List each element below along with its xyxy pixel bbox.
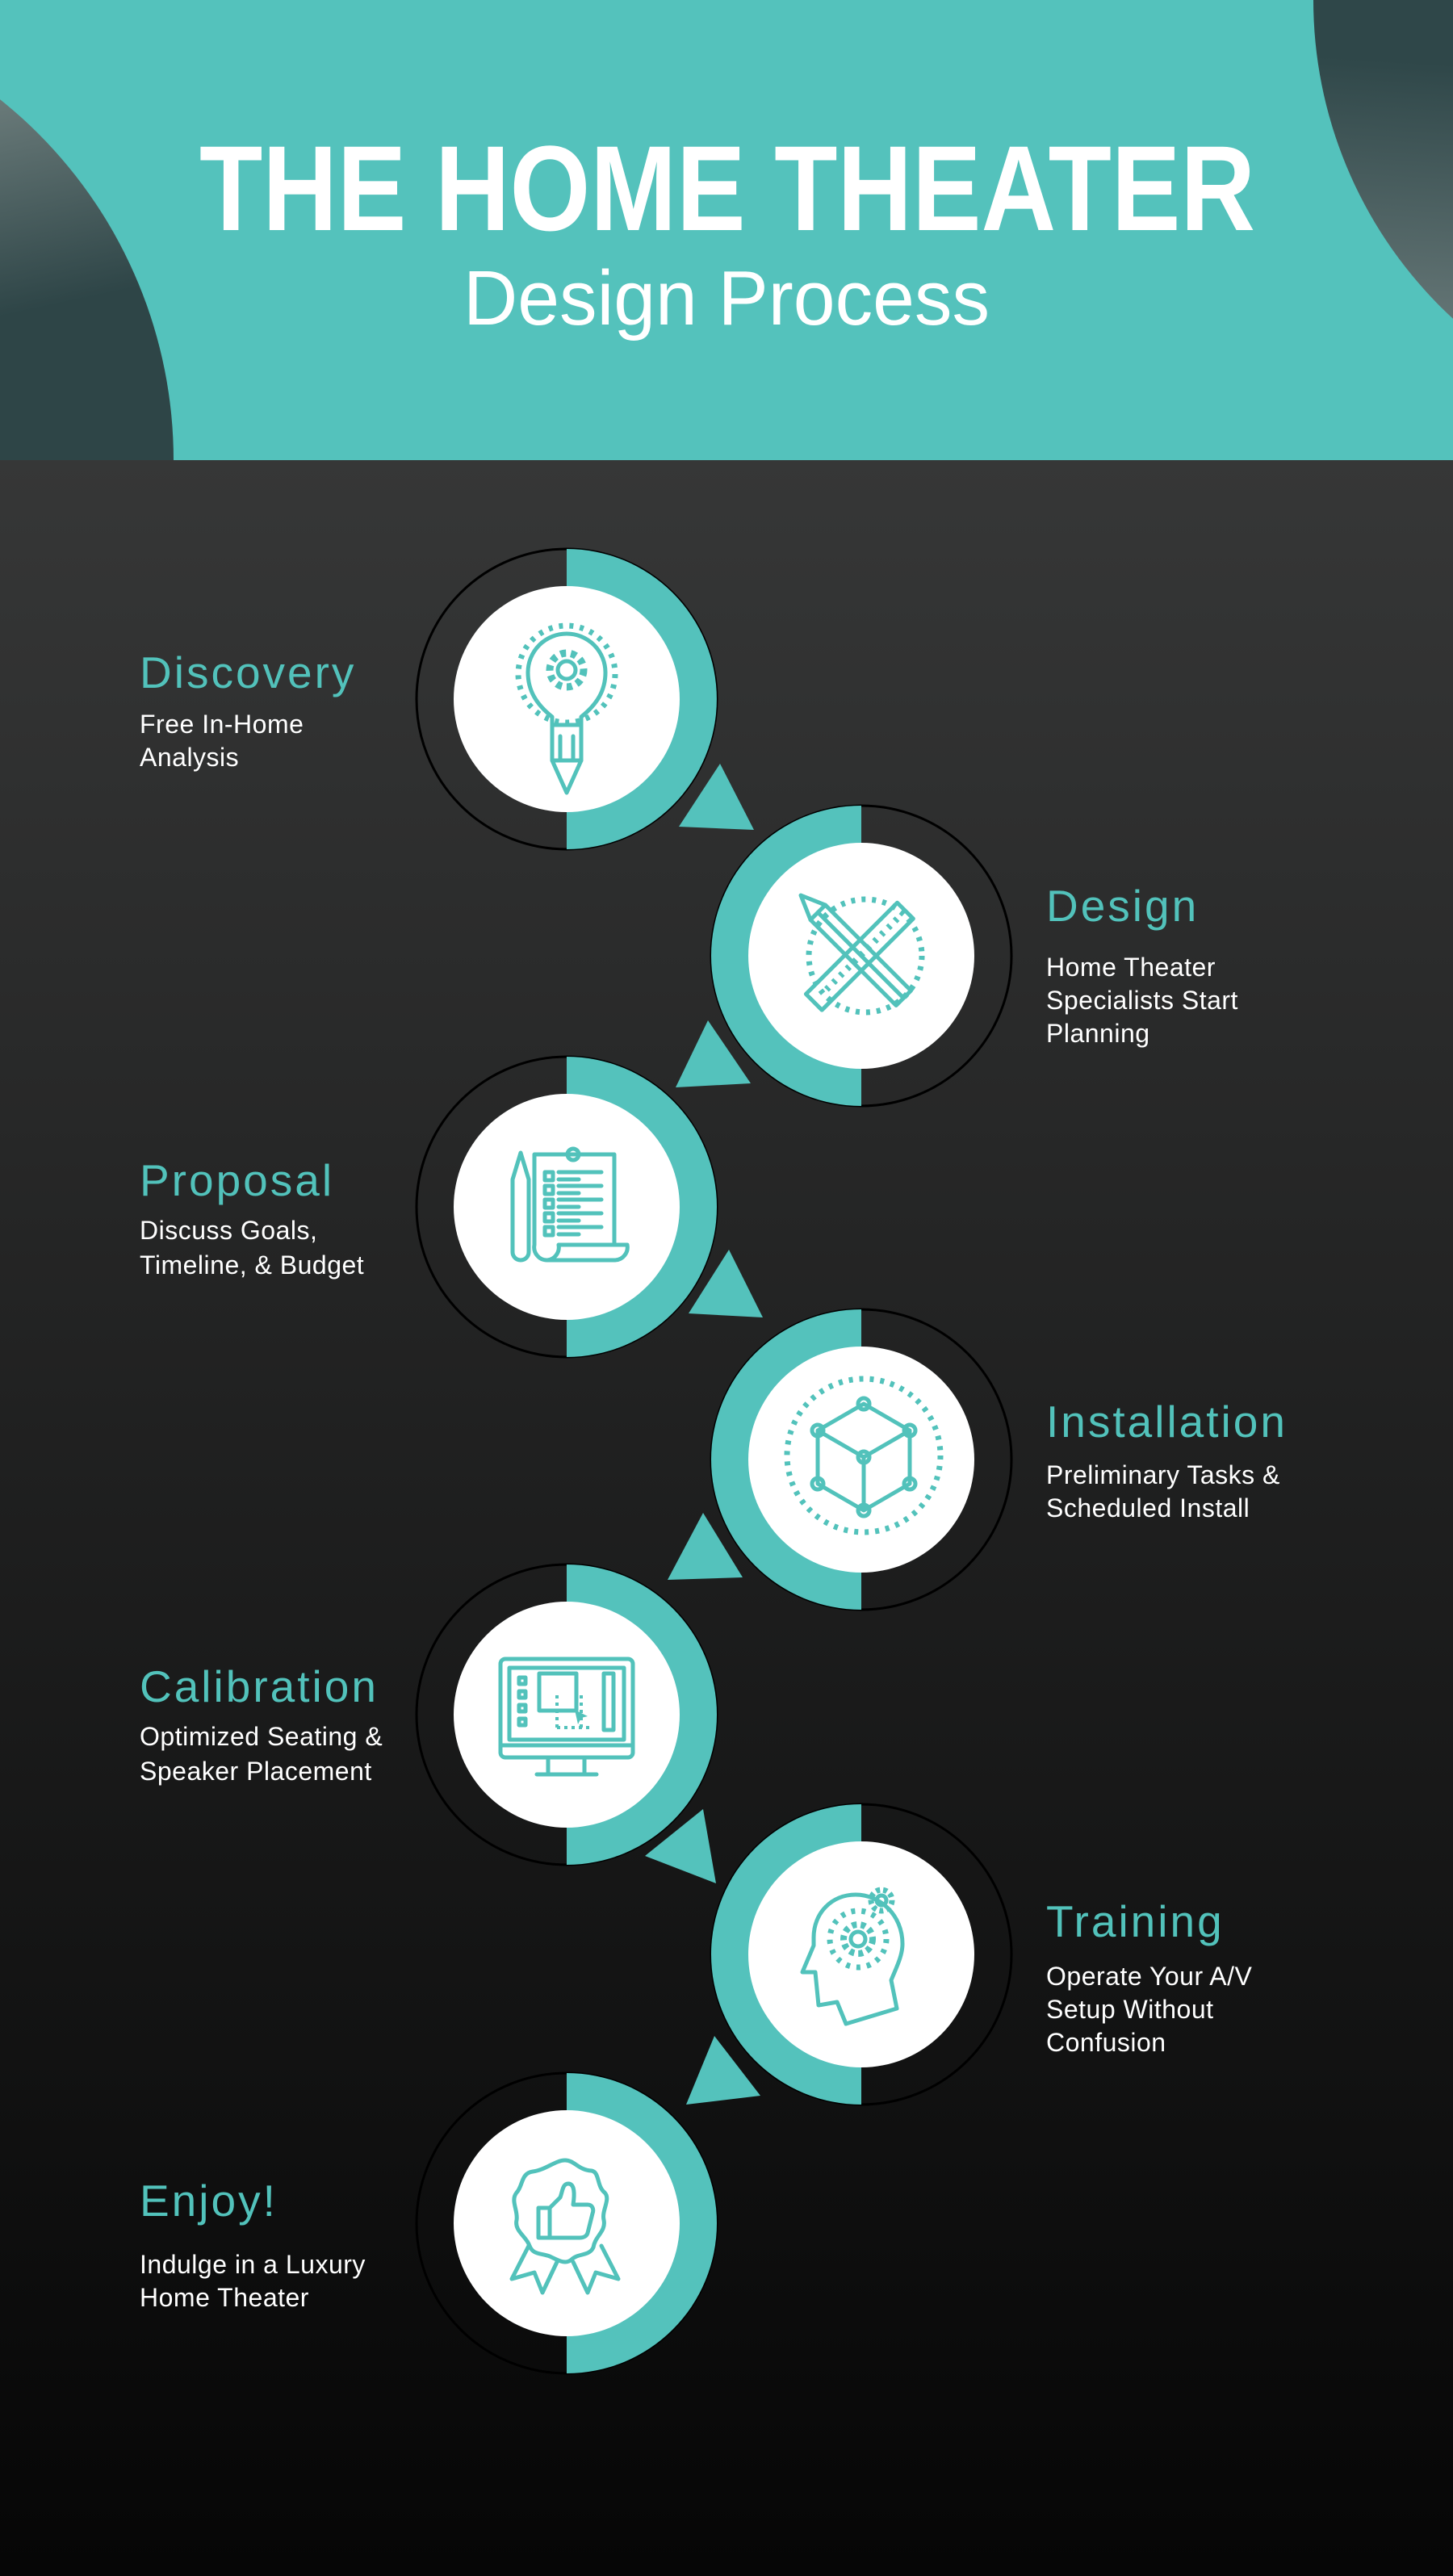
icon: award badge with thumb (512, 2160, 618, 2293)
step 4: Installation (711, 1309, 1288, 1610)
text: Enjoy: Indulge in a Luxury (140, 2250, 366, 2279)
text: Design: Planning (1046, 1019, 1150, 1048)
text: Training: Setup Without (1046, 1995, 1214, 2024)
text: Training (1046, 1896, 1252, 2057)
text: Discovery: Discovery (140, 647, 356, 697)
text: Discovery: Free In-Home (140, 710, 304, 739)
text: Training: Operate Your A/V (1046, 1962, 1252, 1991)
subtitle: Design Process (463, 255, 990, 341)
text: Enjoy: Home Theater (140, 2283, 309, 2312)
text: Calibration: Speaker Placement (140, 1757, 372, 1786)
text: Proposal: Discuss Goals, (140, 1216, 317, 1245)
icon: head with gears (802, 1890, 902, 2024)
step 3: Proposal (140, 1057, 717, 1357)
step 7: Enjoy (140, 2073, 717, 2373)
text: Design (1046, 881, 1238, 1048)
title: THE HOME THEATER (199, 120, 1255, 256)
icon: monitor (500, 1659, 633, 1774)
text: Installation (1046, 1397, 1288, 1523)
text: Discovery: Analysis (140, 743, 239, 772)
text: Discovery (140, 647, 356, 772)
text: Design: Home Theater (1046, 953, 1216, 982)
text: Installation: Installation (1046, 1397, 1288, 1447)
step 5: Calibration (140, 1564, 717, 1865)
step 2: Design (711, 806, 1238, 1106)
text: Training: Training (1046, 1896, 1225, 1946)
text: Proposal: Proposal (140, 1155, 334, 1205)
text: Installation: Scheduled Install (1046, 1493, 1250, 1523)
icon: cube (787, 1379, 940, 1532)
header band (0, 0, 1453, 460)
text: Training: Confusion (1046, 2028, 1166, 2057)
text: Calibration: Calibration (140, 1661, 379, 1711)
text: Calibration: Optimized Seating & (140, 1722, 383, 1751)
icon: document checklist (513, 1149, 627, 1260)
text: Enjoy: Enjoy! (140, 2176, 278, 2226)
text: Design: Design (1046, 881, 1199, 931)
text: Proposal: Timeline, & Budget (140, 1250, 364, 1280)
icon: pencil and ruler (793, 888, 922, 1012)
text: Enjoy (140, 2176, 366, 2312)
text: Calibration (140, 1661, 383, 1786)
icon: lightbulb (518, 626, 615, 793)
step 6: Training (711, 1804, 1252, 2105)
step 1: Discovery (140, 549, 717, 849)
arrow triangles (645, 764, 763, 2105)
text: Design: Specialists Start (1046, 986, 1238, 1015)
text: Installation: Preliminary Tasks & (1046, 1460, 1280, 1489)
text: Proposal (140, 1155, 364, 1280)
